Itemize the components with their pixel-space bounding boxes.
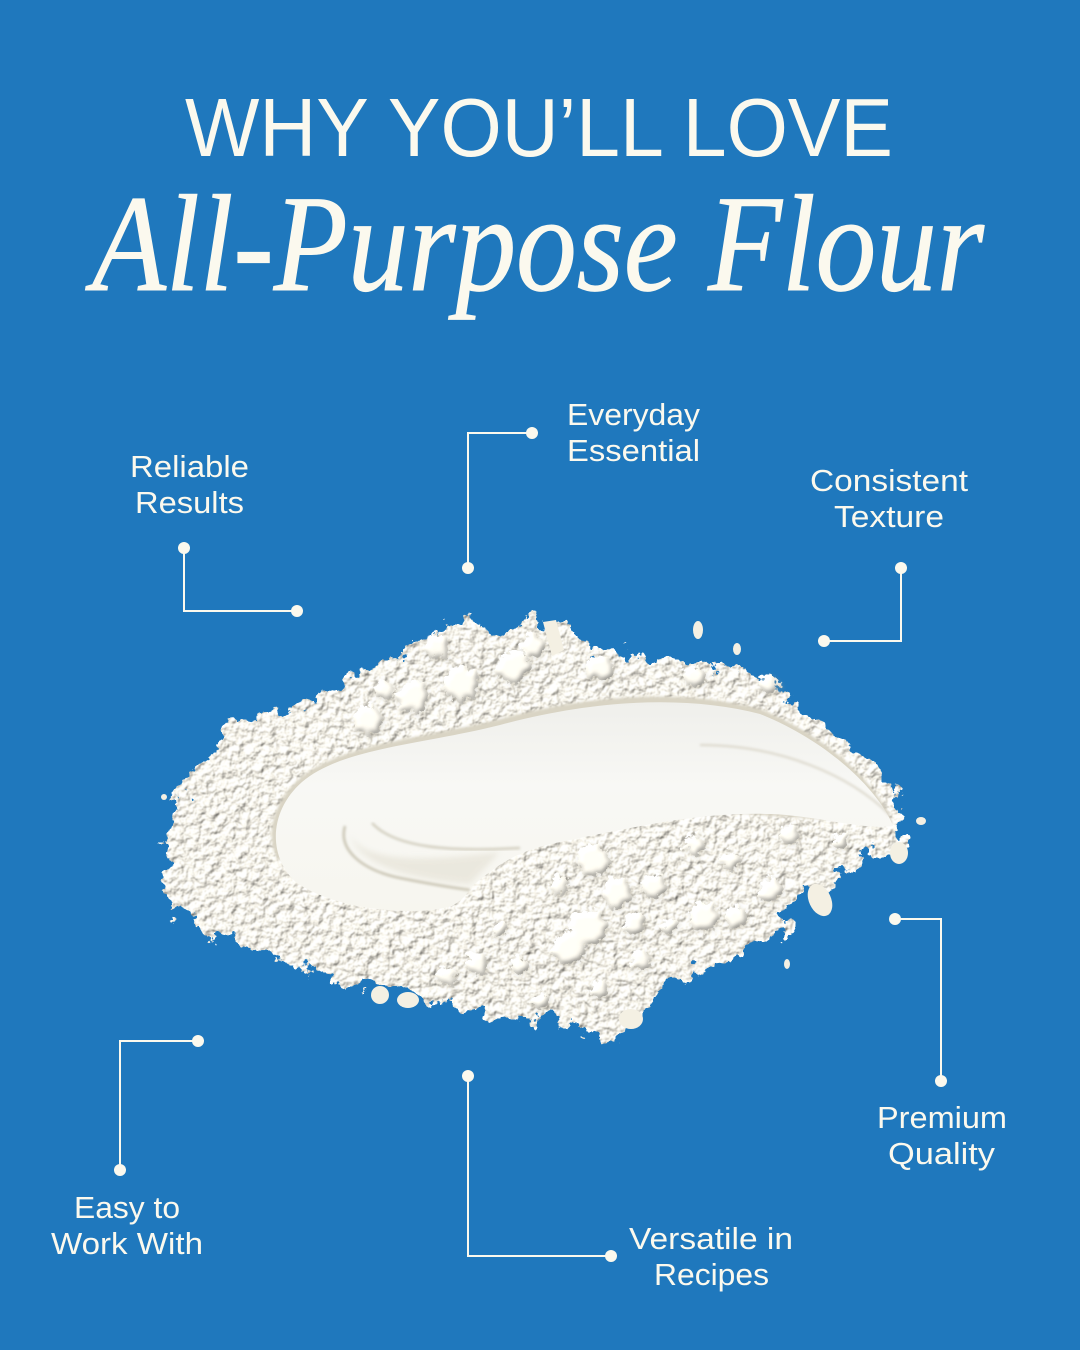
callout: everyday essential xyxy=(462,397,701,574)
connector xyxy=(468,1076,611,1256)
swoosh top edge shadow xyxy=(272,696,893,860)
label: Consistent xyxy=(810,463,968,498)
label: Versatile in xyxy=(629,1221,793,1256)
swoosh tip streak xyxy=(700,745,890,815)
image: flour pile with smooth swoosh xyxy=(160,620,926,1045)
loose crumbs xyxy=(161,620,926,1029)
callout: reliable results xyxy=(130,449,303,617)
smooth swoosh xyxy=(276,702,893,911)
label: Work With xyxy=(51,1226,203,1261)
label: Recipes xyxy=(654,1257,769,1292)
callout: consistent texture xyxy=(810,463,968,647)
flour clumps xyxy=(352,633,848,1008)
label: Reliable xyxy=(130,449,249,484)
label: Premium xyxy=(877,1100,1007,1135)
connector xyxy=(120,1041,198,1170)
label: Results xyxy=(135,485,244,520)
callout: versatile in recipes xyxy=(462,1070,793,1292)
label: Everyday xyxy=(567,397,701,432)
title: all-purpose flour script: All-Purpose Flour xyxy=(85,167,985,320)
connector xyxy=(468,433,532,568)
label: Essential xyxy=(567,433,700,468)
flour crumbs pile xyxy=(160,620,905,1045)
callout: premium quality xyxy=(877,913,1007,1171)
swoosh inner groove xyxy=(344,826,470,890)
title: why you'll love: WHY YOU’LL LOVE xyxy=(185,81,893,174)
connector xyxy=(184,548,297,611)
label: Texture xyxy=(834,499,944,534)
callout: easy to work with xyxy=(51,1035,204,1261)
swoosh lower lobe shading xyxy=(350,835,500,884)
connector xyxy=(895,919,941,1081)
label: Easy to xyxy=(74,1190,180,1225)
label: Quality xyxy=(888,1136,996,1171)
connector xyxy=(824,568,901,641)
